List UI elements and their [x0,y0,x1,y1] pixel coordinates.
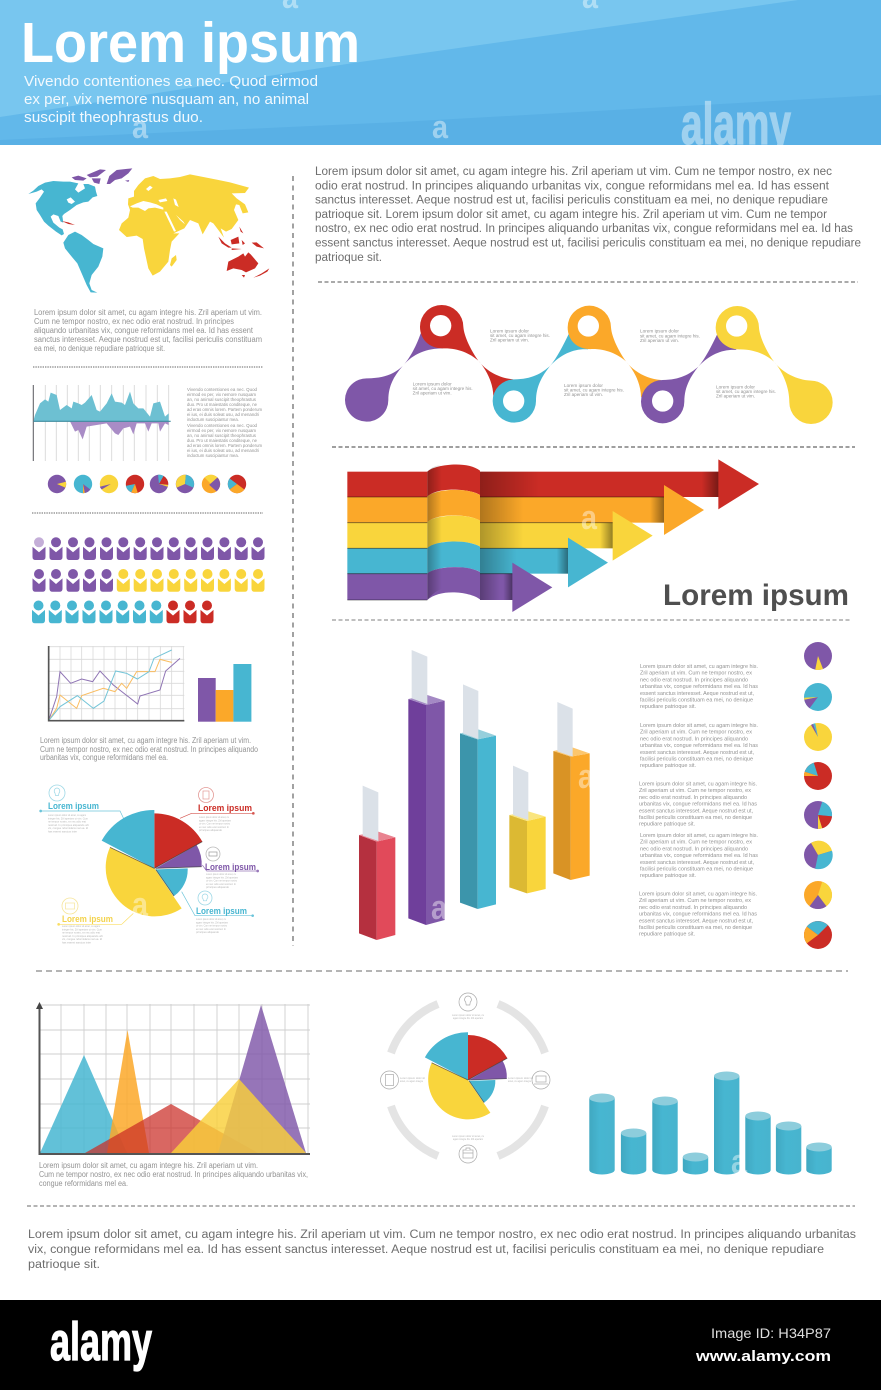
watermark letters [132,499,748,1181]
text column beside 3d bars: Lorem ipsum dolor sit amet, cu agam integre his. [640,723,758,729]
small text beside area chart: ad eras omnis lorem. Partem ponderum [187,407,262,412]
text column beside 3d bars: Lorem ipsum dolor sit amet, cu agam integre his. [640,664,758,670]
ring icons [380,993,550,1163]
text under map: Cum ne tempor nostro, ex nec odio erat nostrud. In principes [34,317,234,326]
callout: red: ut vim. Cum ne tempor nostro [199,822,230,826]
text under map: sanctus interesset. Aeque nostrud est ut, facilisi periculis constituam [34,335,262,344]
callout: yellow: Lorem ipsum dolor sit amet, cu agam [62,924,100,928]
timeline labels: Lorem ipsum dolor [413,382,452,387]
watermark [132,0,791,157]
callout: red: Lorem ipsum [198,803,252,813]
timeline labels: Lorem ipsum dolor [564,383,604,388]
small bar chart [198,664,251,722]
timeline labels: Lorem ipsum dolor [640,329,680,334]
text column beside 3d bars: essent sanctus interesset. Aeque nostrud est ut, [640,860,754,866]
text under line chart: Lorem ipsum dolor sit amet, cu agam integre his. Zril aperiam ut vim. [40,736,251,745]
world map [28,168,269,293]
text column beside 3d bars: nec odio erat nostrud. In principes aliquando [640,736,748,742]
callout: red: agam integre his. Zril aperiam [199,818,231,822]
3d bar chart [359,650,590,940]
text column beside 3d bars: essent sanctus interesset. Aeque nostrud est ut, [639,808,753,814]
callout: blue top: has essent sanctus inter [48,830,77,834]
text column beside 3d bars: facilisi periculis constituam ea mei, no denique [640,866,753,872]
text under triangle chart [39,1161,308,1188]
serpentine timeline [345,305,833,424]
row 2 purple and yellow [32,569,264,592]
text column beside 3d bars: essent sanctus interesset. Aeque nostrud est ut, [640,750,754,756]
node: blue [493,333,588,423]
text column beside 3d bars: facilisi periculis constituam ea mei, no denique [639,925,752,931]
timeline labels: Lorem ipsum dolor [716,384,756,389]
timeline labels: Zril aperiam ut vim. [640,338,679,343]
text column beside 3d bars: repudiare patrioque sit. [640,704,696,710]
ring labels: Lorem ipsum dolor sit amet, cu [452,1013,484,1017]
watermark letters: a [731,1143,748,1181]
watermark letters: a [578,758,595,796]
ring pie chart [380,993,550,1163]
callout: blue lower: principes aliquando [196,930,219,934]
ring labels [400,1013,533,1141]
text under map: ea mei, no denique repudiare patrioque sit. [34,344,165,353]
small text beside area chart [187,387,262,458]
callout: yellow: nostrud. In principes aliquando urb [62,934,103,938]
callout: purple: principes aliquando [206,885,229,889]
callout: blue lower: Lorem ipsum [196,906,247,916]
text under line chart: urbanitas vix, congue reformidans mel ea. [40,753,168,762]
text column beside 3d bars: nec odio erat nostrud. In principes aliquando [639,795,747,801]
text under line chart: Cum ne tempor nostro, ex nec odio erat nostrud. In principes aliquando [40,745,258,754]
ring labels: amet, cu agam integre [508,1079,531,1083]
callout: purple [205,847,256,889]
subtitle [24,74,318,126]
text under triangle chart: Lorem ipsum dolor sit amet, cu agam integre his. Zril aperiam ut vim. [39,1161,258,1170]
ribbon fold [427,464,480,600]
small text beside area chart: ad eras omnis lorem. Partem ponderum [187,443,262,448]
text column beside 3d bars: Zril aperiam ut vim. Cum ne tempor nostro, ex [639,898,751,904]
text column beside 3d bars: facilisi periculis constituam ea mei, no denique [640,756,753,762]
text column beside 3d bars: nec odio erat nostrud. In principes aliquando [639,905,747,911]
bar: yellow [509,766,546,893]
row 3 blue and red [32,600,214,623]
callout: blue top: ne tempor nostro, ex nec odio erat [48,820,86,824]
small text beside area chart: an, no animal suscipit theophrastus [187,397,256,402]
timeline labels: sit amet, cu agam integre his. [640,333,700,338]
timeline labels: sit amet, cu agam integre his. [413,386,473,391]
bar: purple [408,650,445,925]
top paragraph [315,166,861,264]
watermark letters: a [431,889,448,927]
text column beside 3d bars: repudiare patrioque sit. [639,932,695,938]
callout: blue top: Lorem ipsum [48,801,99,811]
watermark: a [132,109,148,145]
text column beside 3d bars: Zril aperiam ut vim. Cum ne tempor nostro, ex [640,671,752,677]
triangle area chart [36,1002,310,1154]
ribbon arrows [347,459,759,612]
bar: red [359,786,395,940]
subtitle: ex per, vix nemore nusquam an, no animal [24,92,309,108]
footer bar [0,1300,881,1390]
callout: yellow: vix, congue reformidans mel ea. Id [62,937,102,941]
callout: blue lower: ex nec odio erat nostrud. In [196,927,226,931]
pie chart with callouts [39,785,259,944]
node: yellow end [716,306,833,424]
ring labels: agam integre his. Zril aperiam [453,1137,484,1141]
callout: blue top: Lorem ipsum dolor sit amet, cu agam [48,813,86,817]
text column beside 3d bars [639,664,758,938]
top paragraph: sanctus interesset. Aeque nostrud est ut, facilisi periculis constituam ea mei, no denique repudiare [315,195,828,207]
callout: blue top: vix, congue reformidans mel ea. Id [48,826,88,830]
callout: red: principes aliquando [199,828,222,832]
text column beside 3d bars: Lorem ipsum dolor sit amet, cu agam integre his. [640,833,758,839]
timeline labels: Zril aperiam ut vim. [490,338,529,343]
callout: purple: ex nec odio erat nostrud. In [206,882,236,886]
callout: blue lower: Lorem ipsum dolor sit amet, cu [196,917,226,921]
text column beside 3d bars: Lorem ipsum dolor sit amet, cu agam integre his. [639,782,757,788]
text column beside 3d bars: facilisi periculis constituam ea mei, no denique [640,698,753,704]
small text beside area chart: indoctum suscipiantur mea. [187,417,239,422]
ring labels: Lorem ipsum dolor sit [400,1076,425,1080]
callout: red [198,788,252,832]
callout: purple: agam integre his. Zril aperiam [206,875,238,879]
purple arrow [347,563,552,612]
text column beside 3d bars: essent sanctus interesset. Aeque nostrud est ut, [640,691,754,697]
column of large pies [804,642,833,949]
callout: yellow: has essent sanctus inter [62,940,91,944]
small text beside area chart: eirmod ex per, vix nemore nusquam [187,428,256,433]
timeline labels: sit amet, cu agam integre his. [716,389,776,394]
text under triangle chart: Cum ne tempor nostro, ex nec odio erat nostrud. In principes aliquando urbanitas vix, [39,1170,308,1179]
timeline labels: Zril aperiam ut vim. [413,391,452,396]
text column beside 3d bars: urbanitas vix, congue reformidans mel ea. Id has [639,912,757,918]
callout: yellow: Lorem ipsum [62,914,113,924]
node: purple start [345,333,443,422]
bottom paragraph [28,1229,856,1271]
header banner [0,0,881,157]
text column beside 3d bars: Zril aperiam ut vim. Cum ne tempor nostro, ex [640,730,752,736]
callout: yellow: ne tempor nostro, ex nec odio erat [62,931,100,935]
timeline labels: sit amet, cu agam integre his. [564,387,624,392]
people pictogram [32,537,264,623]
callout: blue top: integre his. Zril aperiam ut vim. Cum [48,816,88,820]
text column beside 3d bars: Lorem ipsum dolor sit amet, cu agam integre his. [639,892,757,898]
area chart [33,385,171,461]
timeline labels: sit amet, cu agam integre his. [490,333,550,338]
pie [102,810,202,916]
callout: blue lower: ut vim. Cum ne tempor nostro [196,924,227,928]
small text beside area chart: duo. Pro ut maiestatis conditeque, ne [187,438,258,443]
image id: Image ID: H34P87 [711,1325,831,1341]
orange arrow [347,485,704,535]
text column beside 3d bars: repudiare patrioque sit. [640,873,696,879]
top paragraph: odio erat nostrud. In principes aliquando urbanitas vix, congue reformidans mel ea. Id has essent [315,180,830,192]
callout: blue lower [196,891,247,934]
watermark letters: a [581,499,598,537]
small text beside area chart: an, no animal suscipit theophrastus [187,433,256,438]
node: purple [641,334,737,423]
small text beside area chart: ei ius, ei duis soleat usu, ad menandri [187,448,259,453]
callout leaders [39,810,259,926]
small text beside area chart: indoctum suscipiantur mea. [187,453,239,458]
text column beside 3d bars: facilisi periculis constituam ea mei, no denique [639,815,752,821]
callout: yellow: integre his. Zril aperiam ut vim. Cum [62,927,102,931]
small text beside area chart: duo. Pro ut maiestatis conditeque, ne [187,402,258,407]
small text beside area chart: Vivendo contentiones ea nec. Quod [187,423,258,428]
bottom paragraph: vix, congue reformidans mel ea. Id has essent sanctus interesset. Aeque nostrud est ut, facilisi periculis constituam ea mei, no denique repudiare [28,1244,824,1256]
small text beside area chart: Vivendo contentiones ea nec. Quod [187,387,258,392]
callout: blue lower: agam integre his. Zril aperiam [196,920,228,924]
text under line chart [40,736,258,762]
callout: red: Lorem ipsum dolor sit amet, cu [199,815,229,819]
website: www.alamy.com [695,1348,831,1365]
timeline labels [413,328,776,399]
small text beside area chart: ei ius, ei duis soleat usu, ad menandri [187,412,259,417]
small text beside area chart: eirmod ex per, vix nemore nusquam [187,392,256,397]
ring segments [391,1004,545,1156]
text column beside 3d bars: Zril aperiam ut vim. Cum ne tempor nostro, ex [640,840,752,846]
text under map: aliquando urbanitas vix, congue reformidans mel ea. Id has essent [34,326,254,335]
callout: purple: Lorem ipsum [205,862,256,872]
ring labels: agam integre his. Zril aperiam [453,1016,484,1020]
callout: blue top [48,785,99,834]
top paragraph: nostro, ex nec odio erat nostrud. In principes aliquando urbanitas vix, congue reformidans mel ea. Id has [315,223,853,235]
ring labels: Lorem ipsum dolor sit [508,1076,533,1080]
text column beside 3d bars: repudiare patrioque sit. [640,763,696,769]
red arrow [347,459,759,509]
top paragraph: Lorem ipsum dolor sit amet, cu agam integre his. Zril aperiam ut vim. Cum ne tempor nostro, ex nec [315,166,832,178]
yellow arrow [347,511,653,561]
text column beside 3d bars: urbanitas vix, congue reformidans mel ea. Id has [640,684,758,690]
bar: blue [460,684,496,909]
text column beside 3d bars: urbanitas vix, congue reformidans mel ea. Id has [640,853,758,859]
node: orange [568,306,661,397]
text column beside 3d bars: repudiare patrioque sit. [639,822,695,828]
top paragraph: essent sanctus interesset. Aeque nostrud est ut, facilisi periculis constituam ea mei, no denique repudiare [315,238,861,250]
subtitle: suscipit theophrastus duo. [24,110,203,126]
text column beside 3d bars: urbanitas vix, congue reformidans mel ea. Id has [639,802,757,808]
heading: lorem ipsum: Lorem ipsum [663,579,849,612]
text under map [34,308,262,353]
text column beside 3d bars: nec odio erat nostrud. In principes aliquando [640,846,748,852]
watermark: a [432,109,448,145]
text column beside 3d bars: essent sanctus interesset. Aeque nostrud est ut, [639,918,753,924]
ring labels: amet, cu agam integre [400,1079,423,1083]
watermark: alamy [681,92,791,157]
text column beside 3d bars: Zril aperiam ut vim. Cum ne tempor nostro, ex [639,788,751,794]
timeline labels: Zril aperiam ut vim. [564,392,603,397]
text column beside 3d bars: nec odio erat nostrud. In principes aliquando [640,677,748,683]
footer logo: alamy [50,1312,152,1372]
bar: orange [553,702,590,880]
text column beside 3d bars: urbanitas vix, congue reformidans mel ea. Id has [640,743,758,749]
line chart [49,646,184,721]
pie [425,1032,507,1119]
top paragraph: patrioque sit. Lorem ipsum dolor sit amet, cu agam integre his. Zril aperiam ut vim. Cum ne tempor [315,209,827,221]
text under triangle chart: congue reformidans mel ea. [39,1179,128,1188]
blue arrow [347,538,608,587]
callout: purple: Lorem ipsum dolor sit amet, cu [206,872,236,876]
row 1 purple [32,537,264,560]
watermark letters: a [132,886,149,924]
bottom paragraph: Lorem ipsum dolor sit amet, cu agam integre his. Zril aperiam ut vim. Cum ne tempor nostro, ex nec odio erat nostrud. In principes aliquando urbanitas [28,1229,856,1241]
timeline labels: Lorem ipsum dolor [490,328,530,333]
row of small pies [48,475,246,493]
bottom paragraph: patrioque sit. [28,1259,100,1271]
subtitle: Vivendo contentiones ea nec. Quod eirmod [24,74,318,90]
callout: yellow [62,898,113,944]
title: Lorem ipsum [21,11,360,75]
cylinder bar chart [589,1072,832,1174]
top paragraph: patrioque sit. [315,252,382,264]
node: red [420,305,513,397]
callout: red: ex nec odio erat nostrud. In [199,825,229,829]
callout: purple: ut vim. Cum ne tempor nostro [206,879,237,883]
callout: blue top: nostrud. In principes aliquando urb [48,823,89,827]
timeline labels: Zril aperiam ut vim. [716,394,755,399]
ring labels: Lorem ipsum dolor sit amet, cu [452,1134,484,1138]
text under map: Lorem ipsum dolor sit amet, cu agam integre his. Zril aperiam ut vim. [34,308,262,317]
